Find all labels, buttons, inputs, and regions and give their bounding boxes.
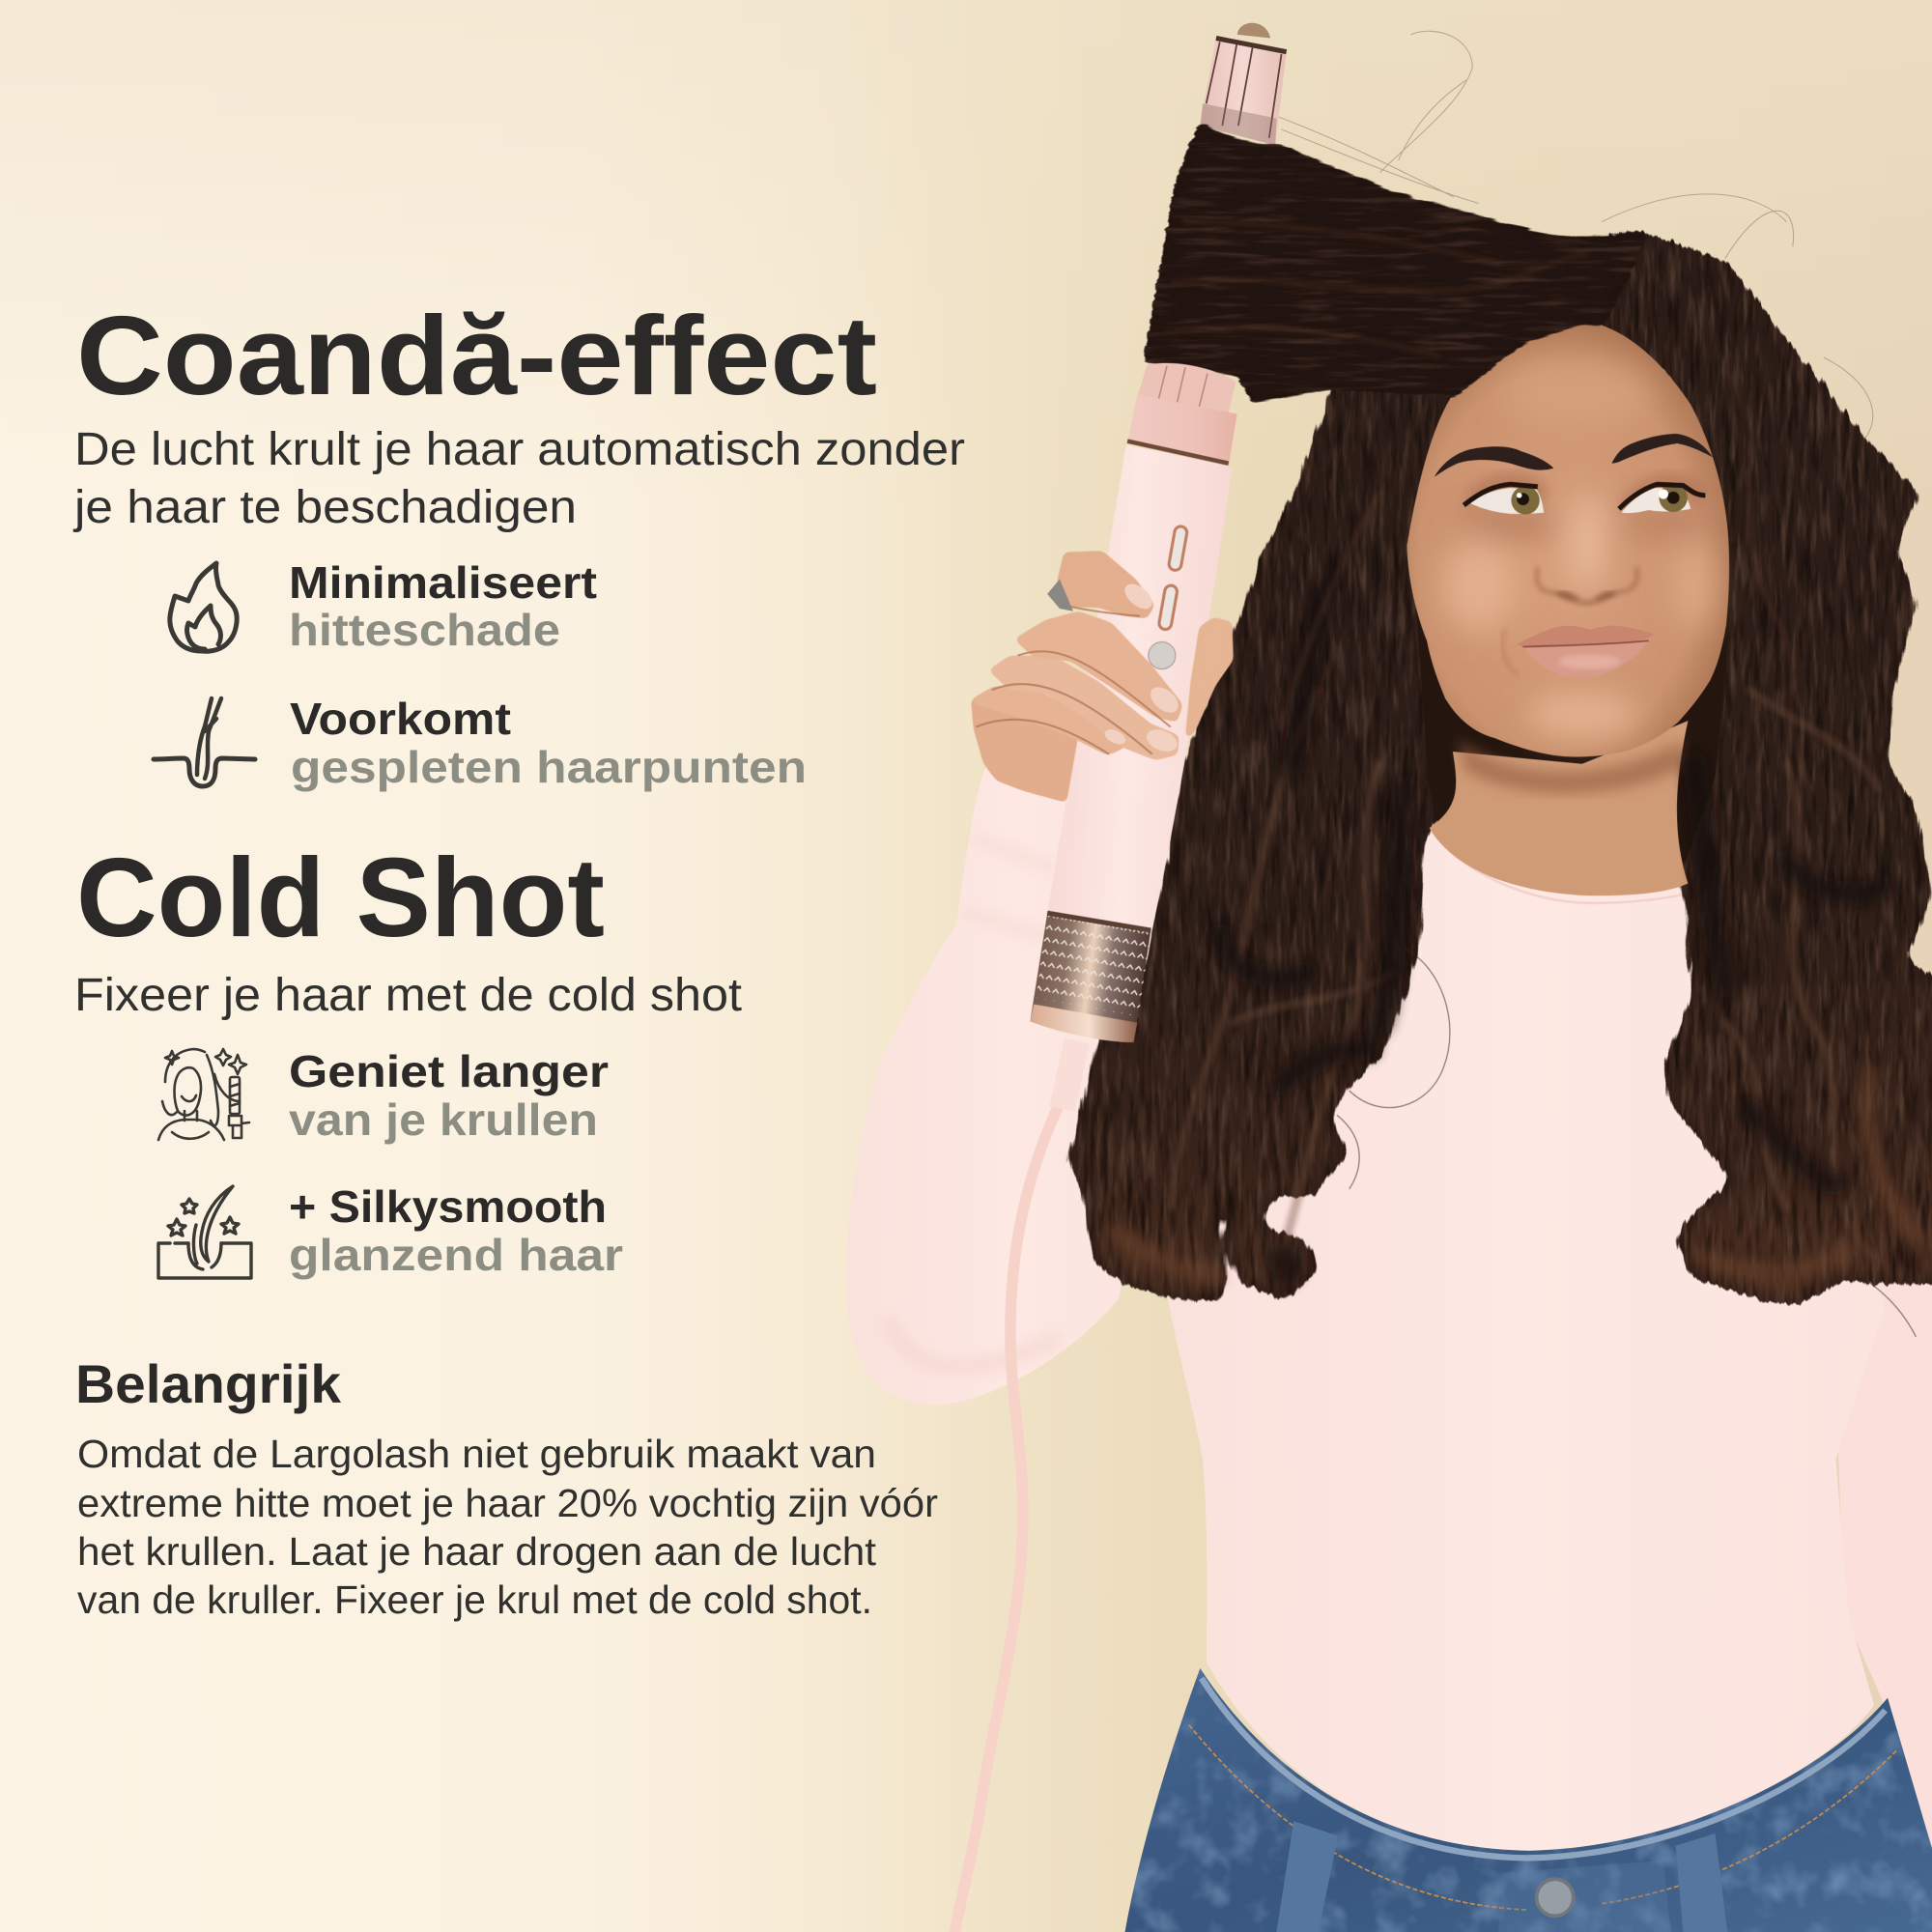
- translucent band: [1200, 103, 1276, 146]
- subheading: Coandă: je haar te beschadigen: [72, 482, 577, 533]
- benefit: Voorkomt: Voorkomt: [290, 694, 511, 744]
- ribbed cover: [1200, 37, 1287, 146]
- shirt: right sleeve: [1824, 1269, 1932, 1848]
- top button: [1168, 526, 1188, 571]
- flyaway hairs: [1279, 31, 1873, 443]
- nose: [1537, 567, 1637, 604]
- vent top band: [1047, 913, 1151, 930]
- icon: shiny hair: [158, 1186, 251, 1278]
- body: [1047, 444, 1233, 930]
- heading: Belangrijk: Belangrijk: [75, 1353, 342, 1414]
- left eye: [1463, 484, 1544, 515]
- curler: handle: [1030, 363, 1237, 1042]
- benefit: Geniet langer: Geniet langer: [289, 1046, 609, 1096]
- left eyebrow: [1435, 446, 1553, 477]
- palm: [974, 689, 1076, 800]
- nails: [1121, 579, 1156, 613]
- power cable: [955, 1041, 1077, 1932]
- hair: left cascade: [1072, 388, 1460, 1300]
- heading: Cold Shot: Cold Shot: [76, 835, 605, 960]
- belt loops: [1276, 1821, 1727, 1932]
- icon: flame: [170, 563, 237, 651]
- paragraph: Belangrijk: het krullen. Laat je haar drogen aan de lucht: [77, 1529, 877, 1574]
- ring finger: [992, 658, 1177, 757]
- paragraph: Belangrijk: van de kruller. Fixeer je krul met de cold shot.: [77, 1577, 872, 1622]
- vent chevrons: [1037, 913, 1151, 1016]
- thin cord: [955, 1109, 1057, 1932]
- neck shadow: [1459, 739, 1683, 793]
- benefit: Minimaliseert: Minimaliseert: [289, 557, 597, 608]
- eye shadow: [1466, 472, 1707, 513]
- finger creases: [976, 605, 1171, 754]
- index finger: [1060, 554, 1152, 616]
- neck: [1430, 721, 1688, 895]
- hair: stray loops over shirt: [1337, 949, 1916, 1337]
- icon: woman with curler: [158, 1049, 249, 1140]
- hair behind neck: [1410, 542, 1737, 863]
- shirt collar: [1430, 828, 1688, 903]
- strain relief: [1062, 1041, 1077, 1109]
- benefit detail: gespleten haarpunten: gespleten haarpunten: [291, 742, 807, 792]
- icon: split hair: [154, 698, 255, 786]
- smile crease: [1502, 629, 1518, 675]
- stitching: [1189, 1725, 1897, 1910]
- benefit detail: glanzend haar: glanzend haar: [289, 1230, 623, 1280]
- heading: Coandă-effect: Coandă-effect: [76, 293, 877, 418]
- hand: [974, 554, 1231, 800]
- subheading: Cold Shot: Fixeer je haar met de cold shot: [74, 970, 742, 1021]
- little finger: [974, 689, 1125, 753]
- collar: [1127, 394, 1237, 466]
- vent: [1030, 913, 1151, 1042]
- top cap: [1237, 23, 1270, 39]
- gold line: [1127, 441, 1229, 464]
- photo: woman using the hair curler: [847, 23, 1932, 1932]
- rim: [1216, 39, 1287, 52]
- cheek and nose highlights: [1441, 359, 1717, 737]
- hair: strands and curls: [1115, 370, 1916, 1275]
- right eyebrow: [1611, 434, 1713, 464]
- paragraph: Belangrijk: extreme hitte moet je haar 20% vochtig zijn vóór: [77, 1481, 938, 1525]
- waistband edge: [1202, 1678, 1886, 1858]
- curler: top barrel: [1200, 23, 1287, 146]
- ring: [1047, 579, 1073, 611]
- benefit detail: hitteschade: hitteschade: [289, 605, 560, 655]
- benefit detail: van je krullen: van je krullen: [289, 1094, 598, 1145]
- face: [1407, 321, 1729, 756]
- right eye: [1619, 484, 1705, 513]
- middle finger: [1018, 613, 1180, 720]
- fly panel: [1498, 1861, 1671, 1932]
- hair: right cascade: [1582, 234, 1932, 1301]
- jeans fabric: [1125, 1668, 1932, 1932]
- thumb: [1188, 620, 1231, 735]
- middle button: [1158, 584, 1178, 631]
- round knob: [1149, 642, 1176, 669]
- shirt: raised sleeve: [847, 766, 1182, 1405]
- vent rim: [1030, 1005, 1137, 1042]
- hair: lock sheen: [1164, 222, 1589, 357]
- jeans: [1125, 1668, 1932, 1932]
- paragraph: Belangrijk: Omdat de Largolash niet gebruik maakt van: [77, 1432, 876, 1476]
- slats: [1207, 42, 1282, 138]
- sleeve folds: [887, 838, 1060, 1367]
- benefit: Silkysmooth: + Silkysmooth: [289, 1181, 607, 1232]
- hair: wrapped lock on barrel: [1147, 126, 1644, 401]
- lower barrel: [1137, 363, 1236, 412]
- jeans button: [1537, 1879, 1574, 1916]
- shirt: torso: [1158, 823, 1886, 1851]
- barrel ribs: [1158, 366, 1208, 408]
- lips: [1517, 626, 1655, 678]
- subheading: Coandă: De lucht krult je haar automatisch zonder: [74, 424, 965, 475]
